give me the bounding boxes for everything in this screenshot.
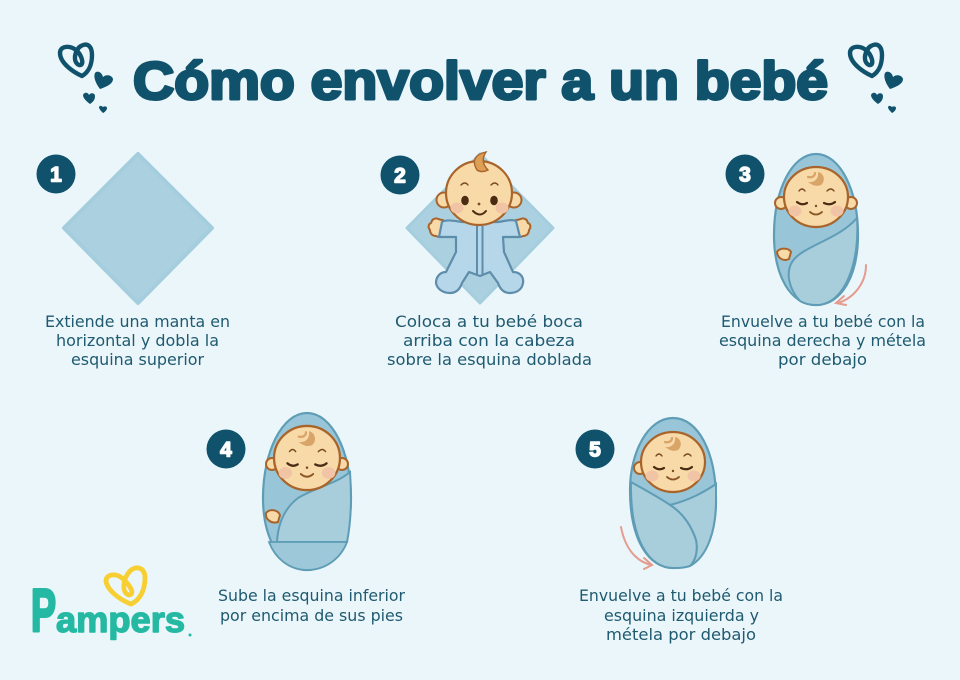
wordmark: P [31, 577, 56, 644]
text: step 1: esquina superior [71, 350, 204, 369]
step number 3: 3 [739, 164, 751, 186]
panel: step 2 [380, 152, 592, 369]
step number 5 [576, 430, 614, 468]
text: step 4: Sube la esquina inferior [218, 586, 405, 605]
text: step 5: esquina izquierda y [604, 606, 759, 625]
step number 2: 2 [394, 164, 406, 188]
step number 1: 1 [50, 164, 62, 186]
icon: blanket diamond with baby [407, 152, 553, 303]
text: step 1: Extiende una manta en [45, 312, 230, 331]
panel: step 1 [36, 154, 230, 369]
icon: swaddled baby, bottom fold [263, 413, 351, 570]
step number 4: 4 [220, 438, 232, 462]
step number 5: 5 [589, 438, 601, 462]
text: step 4: por encima de sus pies [220, 606, 403, 625]
icon: hearts left [60, 45, 113, 113]
wordmark: ampers [56, 599, 185, 640]
icon: blanket diamond [64, 154, 212, 303]
text: step 5: Envuelve a tu bebé con la [579, 586, 783, 605]
arrow: step 3 [836, 265, 866, 305]
registered dot [188, 634, 192, 636]
step number 3 [726, 154, 764, 194]
text: step 3: por debajo [778, 350, 867, 369]
step number 2 [380, 156, 420, 194]
icon: yellow heart [106, 568, 145, 604]
step number 4 [206, 430, 246, 468]
text: step 2: arriba con la cabeza [403, 331, 575, 350]
icon: swaddled baby, fully wrapped [630, 418, 716, 568]
text: step 1: horizontal y dobla la [56, 331, 219, 350]
text: step 2: Coloca a tu bebé boca [395, 312, 583, 331]
logo: Pampers [31, 568, 192, 644]
title: Cómo envolver a un bebé [133, 52, 828, 111]
text: step 2: sobre la esquina doblada [387, 350, 592, 369]
text: step 3: esquina derecha y métela [719, 331, 926, 350]
step number 1 [36, 154, 76, 194]
arrow: step 5 [621, 527, 652, 569]
text: step 3: Envuelve a tu bebé con la [721, 312, 925, 331]
icon: swaddled baby, right corner [774, 154, 858, 305]
panel: step 3 [719, 154, 926, 369]
icon: hearts right [850, 45, 903, 113]
panel: step 4 [206, 413, 405, 625]
text: step 5: métela por debajo [606, 625, 756, 644]
panel: step 5 [576, 418, 783, 644]
